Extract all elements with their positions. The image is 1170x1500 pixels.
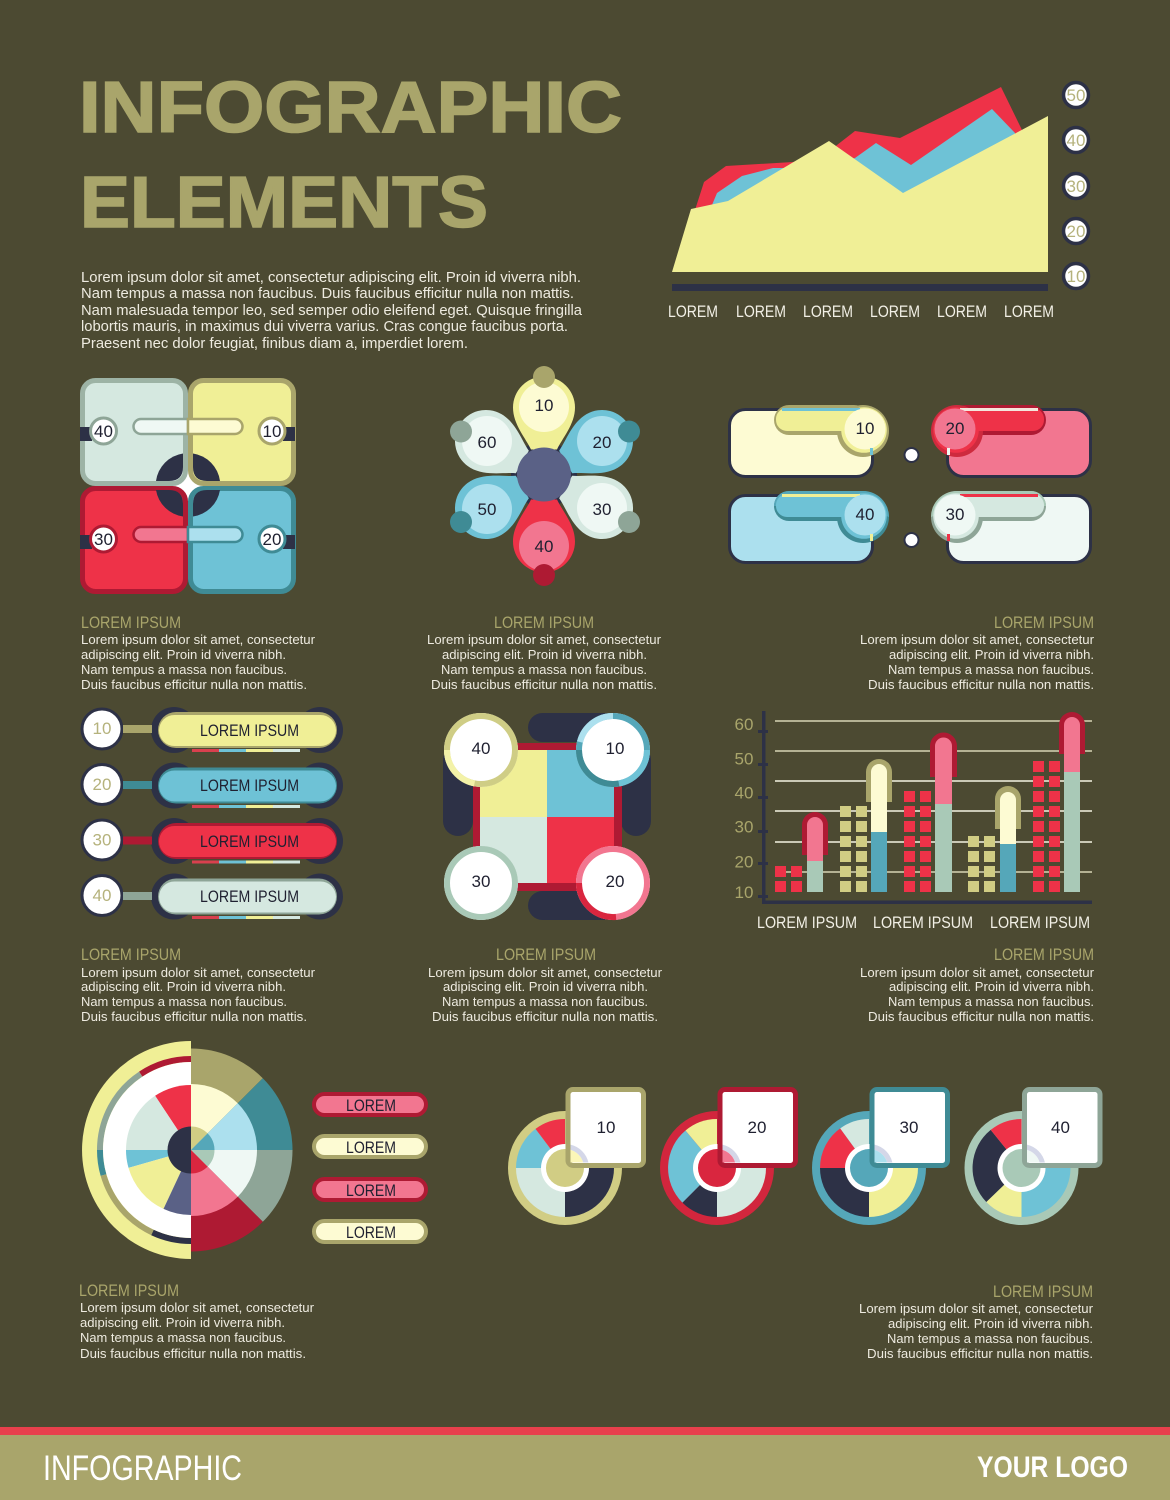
- text block: row 2 left: Duis faucibus efficitur nulla non mattis.: [81, 1009, 307, 1024]
- text block: row 1 center: Duis faucibus efficitur nulla non mattis.: [431, 677, 657, 692]
- list row 20: LOREM IPSUM: [200, 777, 299, 795]
- donut card 10: [508, 1090, 644, 1225]
- connector dots: [904, 448, 918, 547]
- thin segmented ring: [100, 1059, 191, 1241]
- list row 30: 30: [93, 830, 111, 850]
- x axis labels: LOREM IPSUM: [990, 914, 1090, 932]
- donut card 40: [964, 1090, 1100, 1225]
- center white spot: [172, 469, 204, 501]
- text block: row 3 right: LOREM IPSUM: [993, 1283, 1093, 1301]
- x axis labels: [757, 914, 1090, 932]
- list row 30: LOREM IPSUM: [200, 833, 299, 851]
- chart scale badges: 40: [1067, 131, 1085, 150]
- circle 30: 30: [472, 872, 490, 891]
- text block: row 2 left: LOREM IPSUM: [81, 946, 181, 964]
- x axis labels: LOREM IPSUM: [757, 914, 857, 932]
- rounded bar 5: [1059, 712, 1085, 892]
- legend pill 4: LOREM: [346, 1224, 396, 1242]
- tab card 30: 30: [946, 505, 964, 524]
- petal numbers: 50: [478, 500, 496, 519]
- tab card 40: 40: [856, 505, 874, 524]
- y axis labels: [735, 715, 753, 902]
- chart x labels: LOREM: [937, 303, 987, 321]
- square column group 2: [840, 806, 867, 892]
- petal numbers: 30: [593, 500, 611, 519]
- right inner sectors: [191, 1084, 257, 1216]
- legend pill 2: LOREM: [346, 1139, 396, 1157]
- text block: row 1 left: Lorem ipsum dolor sit amet, consectetur: [81, 632, 316, 647]
- center navy leaves: [156, 454, 220, 516]
- card red: [82, 488, 186, 592]
- list row 30: [82, 818, 343, 864]
- petal numbers: 40: [535, 537, 553, 556]
- text block: row 3 left: Lorem ipsum dolor sit amet, consectetur: [80, 1300, 315, 1315]
- text block: row 1 right: [860, 614, 1095, 692]
- intro text block: [81, 269, 583, 352]
- footer band: [0, 1427, 1170, 1500]
- square quadrants: [480, 750, 614, 883]
- panel: four rounded cards: [80, 380, 295, 592]
- text block: row 1 right: adipiscing elit. Proin id viverra nibh.: [889, 647, 1094, 662]
- circle 10: [576, 713, 650, 787]
- text block: row 1 center: Lorem ipsum dolor sit amet, consectetur: [427, 632, 662, 647]
- list row 40: [82, 874, 343, 920]
- text block: row 3 left: [79, 1282, 315, 1361]
- square column group 1: [775, 866, 802, 892]
- flower backing: [511, 442, 577, 508]
- grid lines: [775, 721, 1092, 872]
- tab card 20: [931, 405, 1090, 476]
- text block: row 3 left: adipiscing elit. Proin id viverra nibh.: [80, 1315, 285, 1330]
- text block: row 2 right: Nam tempus a massa non faucibus.: [888, 994, 1094, 1009]
- text block: row 1 right: Duis faucibus efficitur nulla non mattis.: [868, 677, 1094, 692]
- chart x labels: [668, 303, 1054, 321]
- chart x labels: LOREM: [870, 303, 920, 321]
- text block: row 2 center: adipiscing elit. Proin id viverra nibh.: [443, 979, 648, 994]
- rounded bar 3: [930, 732, 957, 892]
- pie hub: [168, 1126, 214, 1174]
- chart x labels: LOREM: [668, 303, 718, 321]
- text block: row 2 left: adipiscing elit. Proin id viverra nibh.: [81, 979, 286, 994]
- legend pill 3: [314, 1179, 426, 1200]
- panel: pill list: [82, 707, 343, 920]
- circle 40: [444, 713, 518, 787]
- badge 30: 30: [94, 530, 113, 549]
- badge 30: [90, 526, 116, 552]
- circle 20: 20: [606, 872, 624, 891]
- title: ELEMENTS: [80, 163, 488, 243]
- rounded bar 1: [802, 812, 828, 892]
- chart scale badges: 10: [1067, 267, 1085, 286]
- tab card 30: [931, 491, 1090, 562]
- intro text block: lobortis mauris, in maximus dui viverra varius. Cras congue faucibus porta.: [81, 318, 568, 335]
- chart x labels: LOREM: [1004, 303, 1054, 321]
- text block: row 1 left: LOREM IPSUM: [81, 614, 181, 632]
- x axis labels: LOREM IPSUM: [873, 914, 973, 932]
- radial pie chart: [82, 1041, 293, 1259]
- text block: row 3 left: Nam tempus a massa non faucibus.: [80, 1330, 286, 1345]
- list row 20: 20: [93, 775, 111, 794]
- intro text block: Nam malesuada tempor leo, sed semper odio eleifend eget. Quisque fringilla: [81, 302, 583, 319]
- circle 20: [576, 846, 650, 920]
- y axis labels: 50: [735, 750, 753, 768]
- text block: row 2 center: Nam tempus a massa non faucibus.: [442, 994, 648, 1009]
- legend pill 3: LOREM: [346, 1182, 396, 1200]
- text block: row 2 right: [860, 946, 1095, 1024]
- y axis labels: 40: [735, 784, 753, 802]
- text block: row 1 center: LOREM IPSUM: [494, 614, 594, 632]
- text block: row 2 left: [81, 946, 316, 1024]
- text block: row 1 right: Nam tempus a massa non faucibus.: [888, 662, 1094, 677]
- text block: row 1 left: [81, 614, 316, 692]
- circle 10: 10: [606, 739, 624, 758]
- text block: row 3 right: Nam tempus a massa non faucibus.: [887, 1331, 1093, 1346]
- panel: tabbed cards: [730, 405, 1090, 562]
- badge 20: [259, 526, 285, 552]
- petal numbers: 20: [593, 433, 611, 452]
- text block: row 3 right: [859, 1283, 1094, 1361]
- text block: row 3 right: Duis faucibus efficitur nulla non mattis.: [867, 1346, 1093, 1361]
- chart x labels: LOREM: [803, 303, 853, 321]
- list row 20: [82, 762, 343, 808]
- navy tabs: [80, 427, 295, 549]
- footer logo: YOUR LOGO: [977, 1451, 1128, 1484]
- text block: row 2 left: Nam tempus a massa non faucibus.: [81, 994, 287, 1009]
- text block: row 1 left: adipiscing elit. Proin id viverra nibh.: [81, 647, 286, 662]
- left pie sectors: [126, 1085, 191, 1215]
- red area: [695, 87, 1022, 272]
- badge 40: [90, 418, 116, 444]
- legend pill 2: [314, 1136, 426, 1157]
- chart scale badges: 30: [1067, 177, 1085, 196]
- donut card 20: 20: [748, 1118, 766, 1137]
- chart x labels: LOREM: [736, 303, 786, 321]
- y axis labels: 20: [735, 852, 753, 872]
- intro text block: Lorem ipsum dolor sit amet, consectetur adipiscing elit. Proin id viverra nibh.: [81, 269, 581, 286]
- square frame: [473, 743, 622, 891]
- text block: row 1 right: LOREM IPSUM: [994, 614, 1094, 632]
- chart scale badges: [1064, 82, 1088, 288]
- petal 10: [513, 376, 575, 450]
- square column group 3: [904, 791, 931, 892]
- square column group 5: [1033, 761, 1060, 892]
- petal numbers: 10: [535, 396, 553, 415]
- pie legend: [314, 1094, 426, 1242]
- circle 40: 40: [472, 739, 490, 758]
- panel: flower diagram: [444, 366, 644, 586]
- petal 40: [513, 500, 575, 572]
- bottom slider bar: [134, 527, 243, 542]
- panel: quadrant square: [443, 713, 651, 920]
- flower hub: [517, 448, 571, 502]
- card yellow: [190, 380, 294, 484]
- axes: [758, 711, 1092, 904]
- text block: row 3 right: Lorem ipsum dolor sit amet, consectetur: [859, 1301, 1094, 1316]
- white half disc: [103, 1062, 191, 1238]
- circle 30: [444, 846, 518, 920]
- list row 10: [82, 707, 343, 753]
- tab card 40: [730, 491, 889, 562]
- card blue: [190, 488, 294, 592]
- rounded bar 2: [866, 759, 892, 892]
- text block: row 2 center: LOREM IPSUM: [496, 946, 596, 964]
- text block: row 1 right: Lorem ipsum dolor sit amet, consectetur: [860, 632, 1095, 647]
- y axis labels: 60: [735, 715, 753, 734]
- tab card 20: 20: [946, 419, 964, 438]
- donut card 40: 40: [1051, 1118, 1070, 1137]
- text block: row 3 left: LOREM IPSUM: [79, 1282, 179, 1300]
- list row 10: 10: [93, 719, 111, 738]
- navy arms: [443, 713, 651, 920]
- tab card 10: [730, 405, 889, 476]
- donut card 30: 30: [900, 1118, 918, 1137]
- rounded bar 4: [995, 786, 1021, 892]
- title: [79, 68, 622, 243]
- petal 20: [550, 399, 644, 489]
- legend pill 1: LOREM: [346, 1097, 396, 1115]
- petal 50: [444, 460, 538, 550]
- donut card 20: [660, 1090, 796, 1225]
- footer title: INFOGRAPHIC: [43, 1449, 242, 1488]
- text block: row 2 right: adipiscing elit. Proin id viverra nibh.: [889, 979, 1094, 994]
- text block: row 2 right: Duis faucibus efficitur nulla non mattis.: [868, 1009, 1094, 1024]
- teal area: [712, 109, 1015, 272]
- title: INFOGRAPHIC: [79, 68, 622, 148]
- chart scale badges: 20: [1067, 222, 1085, 241]
- bar chart: [735, 711, 1092, 932]
- intro text block: Praesent nec dolor feugiat, finibus diam a, imperdiet lorem.: [81, 335, 468, 352]
- petal knobs: [450, 366, 640, 586]
- tab card 10: 10: [856, 419, 874, 438]
- intro text block: Nam tempus a massa non faucibus. Duis faucibus efficitur nulla non mattis.: [81, 285, 574, 302]
- badge 10: 10: [263, 422, 281, 441]
- y axis labels: 10: [735, 883, 753, 902]
- donut card 30: [812, 1090, 948, 1225]
- badge 10: [259, 418, 285, 444]
- donut card 10: 10: [597, 1118, 615, 1137]
- text block: row 1 center: adipiscing elit. Proin id viverra nibh.: [442, 647, 647, 662]
- text block: row 2 right: Lorem ipsum dolor sit amet, consectetur: [860, 965, 1095, 980]
- petal numbers: 60: [478, 433, 496, 452]
- legend pill 4: [314, 1221, 426, 1242]
- square column group 4: [968, 836, 995, 892]
- text block: row 2 center: [428, 946, 663, 1024]
- chart scale badges: 50: [1067, 86, 1085, 105]
- text block: row 1 left: Nam tempus a massa non faucibus.: [81, 662, 287, 677]
- list row 10: LOREM IPSUM: [200, 722, 299, 740]
- text block: row 3 left: Duis faucibus efficitur nulla non mattis.: [80, 1346, 306, 1361]
- badge 40: 40: [94, 422, 113, 441]
- text block: row 1 center: Nam tempus a massa non faucibus.: [441, 662, 647, 677]
- card mint: [82, 380, 186, 484]
- list row 40: 40: [93, 886, 111, 905]
- text block: row 2 left: Lorem ipsum dolor sit amet, consectetur: [81, 965, 316, 980]
- list row 40: LOREM IPSUM: [200, 888, 299, 906]
- text block: row 3 right: adipiscing elit. Proin id viverra nibh.: [888, 1316, 1093, 1331]
- top slider bar: [134, 419, 243, 434]
- text block: row 2 right: LOREM IPSUM: [994, 946, 1094, 964]
- outer yellow half ring: [82, 1041, 191, 1259]
- yellow area: [672, 116, 1048, 272]
- y axis labels: 30: [735, 818, 753, 836]
- area chart: [668, 82, 1088, 321]
- text block: row 1 center: [427, 614, 662, 692]
- legend pill 1: [314, 1094, 426, 1115]
- petal 30: [550, 460, 644, 550]
- text block: row 2 center: Lorem ipsum dolor sit amet, consectetur: [428, 965, 663, 980]
- right outer sectors: [191, 1048, 292, 1252]
- badge 20: 20: [263, 530, 281, 549]
- text block: row 2 center: Duis faucibus efficitur nulla non mattis.: [432, 1009, 658, 1024]
- petal 60: [444, 399, 538, 489]
- petal faces: [462, 382, 627, 571]
- chart baseline: [672, 284, 1048, 291]
- petal numbers: [478, 396, 611, 556]
- text block: row 1 left: Duis faucibus efficitur nulla non mattis.: [81, 677, 307, 692]
